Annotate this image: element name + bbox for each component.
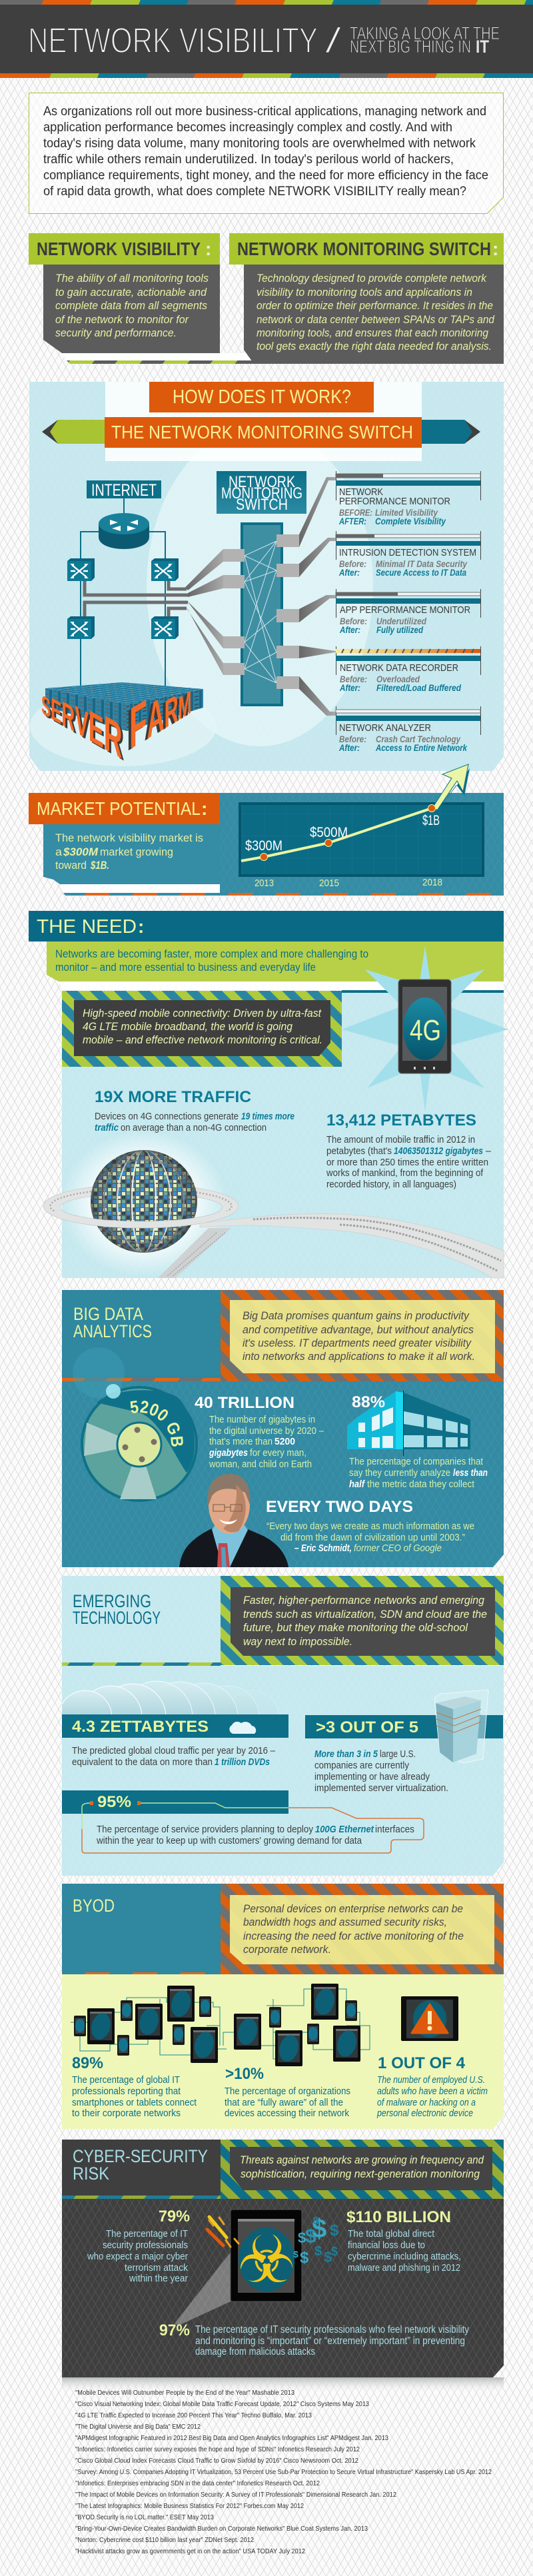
icon: dollar signs xyxy=(293,2214,339,2267)
definition text xyxy=(257,272,494,352)
stat: 13,412 petabytes: or more than 250 times the entire written xyxy=(326,1157,488,1168)
heading colon: : xyxy=(201,798,207,819)
references list: "4G LTE Traffic Expected to Increase 200 Percent This Year" Techno Buffalo, Mar. 2013 xyxy=(75,2411,312,2419)
panel shadow xyxy=(62,2377,504,2393)
references list: "Infonetics: Enterprises embracing SDN in the data center" Infonetics Research Oct. 2012 xyxy=(75,2479,320,2487)
server farm: FARM xyxy=(127,663,189,765)
quote: every two days: former CEO of Google xyxy=(354,1543,442,1554)
illustration: data globe with paper ribbon xyxy=(43,1130,504,1278)
network links xyxy=(81,498,165,686)
server farm xyxy=(41,661,203,772)
callout: corporate network. xyxy=(243,1943,331,1956)
icon: cloud xyxy=(229,1722,256,1734)
references list: "Mobile Devices Will Outnumber People by the End of the Year" Mashable 2013 xyxy=(75,2389,294,2397)
panel: network visibility definition xyxy=(29,233,254,360)
icon: dollar signs: $ xyxy=(331,2245,338,2258)
stat: 19x more traffic: traffic xyxy=(95,1123,119,1133)
heading colon: : xyxy=(138,916,144,937)
intro text box: today's rising data volume, many monitoring tools are overwhelmed with network xyxy=(43,137,476,151)
panel: network monitoring switch definition xyxy=(67,233,504,364)
definition text: order to optimize their performance. It resides in the xyxy=(257,299,493,312)
tool: network data recorder: Before: xyxy=(340,674,367,684)
stat: 40 trillion: the digital universe by 2020 – xyxy=(209,1426,324,1437)
stat: 110 billion: $110 BILLION xyxy=(346,2208,451,2226)
stat: 19x more traffic: 19X MORE TRAFFIC xyxy=(95,1088,251,1106)
stat: 89%: smartphones or tablets connect xyxy=(72,2098,197,2108)
market text: $1B. xyxy=(90,859,109,872)
tool: network performance monitor: NETWORK xyxy=(339,486,383,498)
definition text: tool gets exactly the right data needed for analysis. xyxy=(257,340,492,352)
callout: increasing the need for active monitoring of the xyxy=(243,1930,464,1942)
quote: every two days xyxy=(266,1498,474,1554)
callout: into networks and applications to make it all work. xyxy=(243,1350,475,1363)
lead text xyxy=(55,948,368,973)
illustration: connected devices xyxy=(71,1984,370,2066)
stat: 19x more traffic: Devices on 4G connections generate xyxy=(95,1111,239,1122)
disc capacity label: 5200 GB xyxy=(131,1401,183,1447)
tool: intrusion detection system xyxy=(336,531,481,578)
value labels xyxy=(245,813,440,854)
stat: over 10%: devices accessing their network xyxy=(225,2108,350,2119)
stat: 95%: within the year to keep up with customers' growing demand for data xyxy=(96,1836,362,1846)
switch label box: MONITORING xyxy=(221,484,302,502)
heading: MARKET POTENTIAL xyxy=(37,798,201,819)
references list: "APMdigest Infographic Featured in 2012 Best Big Data and Open Analytics Infographics List" APMdigest Jan. 2013 xyxy=(75,2434,388,2442)
tool: network analyzer: After: xyxy=(338,742,360,753)
references list: "Norton: Cybercrime cost $110 billion last year" ZDNet Sept. 2012 xyxy=(75,2536,254,2544)
stat: more than 3 out of 5: More than 3 in 5 xyxy=(314,1749,378,1760)
stat: 40 trillion: for every man, xyxy=(250,1448,306,1459)
references list xyxy=(75,2389,492,2555)
stat: 4.3 zettabytes: equivalent to the data on more than xyxy=(72,1757,213,1768)
line chart xyxy=(240,764,483,889)
stat: 1 out of 4 xyxy=(376,2054,488,2119)
tool: network data recorder xyxy=(336,646,481,693)
stat: 79%: security professionals xyxy=(103,2240,188,2251)
intro text box: application performance becomes increasingly complex and costly. And with xyxy=(43,121,452,135)
stat: 4.3 zettabytes: The predicted global cloud traffic per year by 2016 – xyxy=(72,1746,276,1756)
icon: dollar signs: $ xyxy=(300,2249,309,2267)
stat: 97%: and monitoring is “important” or “extremely important” in preventing xyxy=(195,2335,465,2347)
stat: 79% xyxy=(87,2208,190,2284)
tool: app performance monitor xyxy=(336,589,481,635)
stat: 79%: 79% xyxy=(159,2208,190,2226)
definition text: visibility to monitoring tools and applications in xyxy=(257,286,472,299)
tool: network analyzer xyxy=(336,706,481,753)
tool: network analyzer: NETWORK ANALYZER xyxy=(339,722,431,734)
stat: 1 out of 4: 1 OUT OF 4 xyxy=(378,2054,466,2072)
icon: dollar signs: $ xyxy=(324,2249,332,2265)
server farm: SERVER xyxy=(43,671,125,772)
intro text box xyxy=(29,93,504,213)
heading: TECHNOLOGY xyxy=(73,1608,161,1628)
stat: 89%: to their corporate networks xyxy=(72,2108,181,2119)
panel: BYOD xyxy=(62,1884,504,2129)
icon: dollar signs: $ xyxy=(313,2216,319,2227)
header banner xyxy=(0,0,533,78)
stat: 97%: The percentage of IT security professionals who feel network visibility xyxy=(195,2324,469,2335)
icon: dollar signs: $ xyxy=(298,2230,306,2246)
stat: 110 billion: The total global direct xyxy=(348,2229,434,2240)
stat: 110 billion xyxy=(346,2208,461,2273)
icon: dollar signs: $ xyxy=(314,2244,322,2259)
heading: EMERGING xyxy=(73,1591,151,1611)
central switch block xyxy=(223,524,299,705)
portrait: Eric Schmidt xyxy=(179,1474,288,1567)
references list: "Cisco Visual Networking Index: Global Mobile Data Traffic Forecast Update, 2012" Cisco Systems May 2013 xyxy=(75,2400,369,2408)
callout: way next to impossible. xyxy=(243,1635,352,1648)
stat: 13,412 petabytes: petabytes (that's xyxy=(326,1146,392,1157)
icon: dollar signs: $ xyxy=(305,2226,316,2248)
year labels: 2013 xyxy=(255,878,274,889)
tool: network analyzer: Before: xyxy=(339,734,366,744)
stat: 110 billion: cybercrime including attacks, xyxy=(348,2252,461,2262)
callout xyxy=(230,2147,492,2190)
icon: faint disc xyxy=(73,1347,125,1398)
illustration: stack of DVDs xyxy=(62,1680,278,1714)
definition text: to gain accurate, actionable and xyxy=(55,286,207,299)
server farm: SERVER xyxy=(41,669,123,770)
heading xyxy=(73,2146,208,2184)
definition text: network or data center between SPANs or TAPs and xyxy=(257,313,494,326)
tool: intrusion detection system: Minimal IT Data Security xyxy=(376,558,468,569)
definition text: Technology designed to provide complete network xyxy=(257,272,487,285)
tool: intrusion detection system: INTRUSION DETECTION SYSTEM xyxy=(339,547,476,558)
stat: 40 trillion: The number of gigabytes in xyxy=(209,1415,315,1425)
top colour stripe xyxy=(0,0,533,5)
subtitle: NEXT BIG THING IN xyxy=(350,37,471,57)
year labels: 2018 xyxy=(422,877,442,888)
how does it work heading: HOW DOES IT WORK? xyxy=(173,386,351,408)
stat: 19x more traffic: on average than a non-4G connection xyxy=(121,1123,266,1133)
tool: app performance monitor: After: xyxy=(339,624,360,635)
banner: the network monitoring switch: THE NETWORK MONITORING SWITCH xyxy=(111,422,413,442)
title: NETWORK VISIBILITY xyxy=(28,21,318,61)
subtitle xyxy=(350,23,500,57)
icon: attack arrows xyxy=(207,2217,239,2247)
stat: 89%: 89% xyxy=(72,2054,103,2072)
stat: 1 out of 4: of malware or hacking on a xyxy=(377,2098,476,2108)
definition text xyxy=(55,272,209,339)
subtitle: IT xyxy=(476,37,489,57)
callout: Faster, higher-performance networks and emerging xyxy=(243,1594,485,1607)
tool: network performance monitor: PERFORMANCE MONITOR xyxy=(339,496,450,507)
intro text box: As organizations roll out more business-critical applications, managing network and xyxy=(43,105,486,119)
panel: market potential xyxy=(29,764,504,896)
light beam xyxy=(175,2252,231,2325)
stat: more than 3 out of 5: large U.S. xyxy=(380,1749,416,1760)
callout: mobile connectivity xyxy=(62,991,342,1067)
tool: network performance monitor: Limited Visibility xyxy=(375,507,438,518)
heading colon: : xyxy=(492,239,498,259)
heading: RISK xyxy=(73,2164,109,2184)
stat: 97% xyxy=(159,2321,469,2357)
stat: 40 trillion: gigabytes xyxy=(209,1448,248,1459)
switch label box xyxy=(217,471,306,514)
callout: Big Data promises quantum gains in productivity xyxy=(243,1309,470,1322)
sparkle xyxy=(106,1384,121,1399)
stat: 97%: 97% xyxy=(159,2321,190,2339)
stat: 110 billion: financial loss due to xyxy=(348,2240,425,2251)
title slash: / xyxy=(324,21,342,61)
stat: 89% xyxy=(72,2054,197,2119)
callout: trends such as virtualization, SDN and cloud are the xyxy=(243,1608,487,1620)
callout: mobile connectivity: mobile – and effective network monitoring is critical. xyxy=(83,1033,322,1046)
callout: it's useless. IT departments need greater visibility xyxy=(243,1337,472,1349)
definition text: complete data from all segments xyxy=(55,299,207,312)
references list: "The Latest Infographics: Mobile Business Statistics For 2012" Forbes.com May 2012 xyxy=(75,2502,304,2510)
heading: NETWORK VISIBILITY xyxy=(37,239,201,259)
tool: intrusion detection system: After: xyxy=(338,567,360,578)
heading xyxy=(73,1591,161,1628)
stat: 79%: terrorism attack xyxy=(125,2263,189,2273)
market text: The network visibility market is xyxy=(55,832,203,844)
value labels: $300M xyxy=(245,838,282,854)
tool: network data recorder: NETWORK DATA RECORDER xyxy=(340,662,458,674)
quote: every two days: EVERY TWO DAYS xyxy=(266,1498,413,1516)
stat: 13,412 petabytes xyxy=(326,1111,492,1190)
stat: 88%: half xyxy=(349,1479,366,1490)
stat: 19x more traffic xyxy=(95,1088,294,1133)
references list: "Cisco Global Cloud Index Forecasts Cloud Traffic to Grow Sixfold by 2016" Cisco Newsroom Oct. 2012 xyxy=(75,2457,358,2465)
references list: "BYOD Security is no LOL matter." ESET May 2013 xyxy=(75,2513,214,2521)
stat: over 10%: that are “fully aware” of all the xyxy=(225,2098,343,2108)
callout: mobile connectivity: 4G LTE mobile broadband, the world is going xyxy=(83,1020,292,1033)
lead text: monitor – and more essential to business and everyday life xyxy=(55,961,316,973)
stat: 4.3 zettabytes: 4.3 ZETTABYTES xyxy=(72,1718,209,1736)
stat: 95%: 100G Ethernet xyxy=(315,1824,374,1835)
icon: tablet with biohazard xyxy=(231,2210,302,2301)
tool: network performance monitor: AFTER: xyxy=(338,516,366,526)
stat: 13,412 petabytes: – xyxy=(486,1146,492,1157)
icon: malware warning tablet xyxy=(401,1996,458,2041)
stat: 1 out of 4: personal electronic device xyxy=(376,2108,473,2119)
year labels: 2015 xyxy=(319,878,339,889)
tool: app performance monitor: Before: xyxy=(340,616,367,626)
stat: 19x more traffic: 19 times more xyxy=(241,1111,294,1122)
stat: 110 billion: malware and phishing in 2012 xyxy=(348,2263,460,2273)
switch label box: NETWORK xyxy=(229,473,295,491)
heading colon: : xyxy=(205,239,211,259)
tool: network data recorder: Filtered/Load Buffered xyxy=(376,682,461,693)
stat: 4.3 zettabytes: 1 trillion DVDs xyxy=(215,1757,270,1768)
heading: THE NEED xyxy=(37,916,137,938)
panel: cyber-security risk xyxy=(62,2140,504,2377)
stat: 1 out of 4: adults who have been a victim xyxy=(377,2086,488,2097)
callout: Personal devices on enterprise networks can be xyxy=(243,1902,463,1915)
stat: 13,412 petabytes: works of mankind, from the beginning of xyxy=(326,1168,484,1179)
stat: 88%: say they currently analyze xyxy=(349,1468,450,1479)
icon: switches xyxy=(67,558,179,639)
stat: 88%: The percentage of companies that xyxy=(349,1457,483,1467)
stat: 13,412 petabytes: The amount of mobile traffic in 2012 in xyxy=(326,1135,475,1145)
references list: "Hacktivist attacks grow as governments get in on the action" USA TODAY July 2012 xyxy=(75,2547,305,2555)
callout: future, but they make monitoring the old-school xyxy=(243,1621,468,1634)
stat: 95%: The percentage of service providers planning to deploy xyxy=(97,1824,314,1835)
circuit outline xyxy=(82,1803,424,1853)
references list: "Infonetics: Infonetics carrier survey exposes the hope and hype of SDNs" Infonetics Research July 2012 xyxy=(75,2445,360,2453)
references list: "Bring-Your-Own-Device Creates Bandwidth Burden on Corporate Networks" Blue Coat Systems Jan. 2013 xyxy=(75,2525,368,2533)
callout xyxy=(230,1895,494,1964)
icon: tablet with biohazard: ☣ xyxy=(237,2222,296,2298)
stat: over 10% xyxy=(225,2065,350,2119)
stat: 95%: interfaces xyxy=(375,1824,414,1835)
panel: emerging technology xyxy=(59,1576,504,1876)
stat: 13,412 petabytes: recorded history, in all languages) xyxy=(326,1179,456,1190)
heading: CYBER-SECURITY xyxy=(73,2146,208,2166)
tool: network data recorder: After: xyxy=(339,682,360,693)
how does it work heading xyxy=(149,382,374,412)
callout xyxy=(230,1300,495,1373)
definition text: security and performance. xyxy=(55,326,177,339)
callout: Threats against networks are growing in frequency and xyxy=(240,2154,484,2166)
value labels: $500M xyxy=(310,825,348,840)
references list: "The Digital Universe and Big Data" EMC 2012 xyxy=(75,2423,201,2431)
intro text box: traffic while others remain underutilized. In today's perilous world of hackers, xyxy=(43,153,454,167)
definition text: of the network to monitor for xyxy=(55,313,189,326)
switch label box: SWITCH xyxy=(236,496,288,514)
stat: 79%: within the year xyxy=(129,2273,188,2284)
stat: 97%: damage from malicious attacks xyxy=(195,2346,315,2357)
heading: ANALYTICS xyxy=(73,1321,152,1341)
tool: network analyzer: Access to Entire Network xyxy=(375,742,468,753)
panel: big data analytics xyxy=(62,1290,504,1567)
intro text box: compliance requirements, tight money, and the need for more efficiency in the face xyxy=(43,169,488,183)
stat: 13,412 petabytes: 14063501312 gigabytes xyxy=(394,1146,483,1157)
callout xyxy=(231,1587,495,1656)
heading: NETWORK MONITORING SWITCH xyxy=(237,239,491,259)
references list: "The Impact of Mobile Devices on Information Security: A Survey of IT Professionals" Dimensional Research Jan. 2012 xyxy=(75,2491,396,2499)
stat: 40 trillion: woman, and child on Earth xyxy=(209,1459,312,1470)
tool: app performance monitor: Fully utilized xyxy=(376,624,423,635)
stat: 89%: The percentage of global IT xyxy=(72,2075,180,2086)
callout: and competitive advantage, but without analytics xyxy=(243,1323,474,1336)
stat: more than 3 out of 5: companies are currently xyxy=(314,1760,410,1771)
tool: app performance monitor: APP PERFORMANCE MONITOR xyxy=(340,604,470,616)
stat: more than 3 out of 5: implemented server virtualization. xyxy=(314,1783,448,1794)
illustration: 5200 GB globe disc xyxy=(81,1384,198,1502)
data points xyxy=(260,805,436,861)
stat: more than 3 out of 5 xyxy=(305,1690,503,1794)
stat: 95%: 95% xyxy=(97,1793,131,1811)
tool: intrusion detection system: Secure Access to IT Data xyxy=(376,567,466,578)
market text: market growing xyxy=(100,846,173,858)
internet box: INTERNET xyxy=(91,481,157,500)
market text: $300M xyxy=(63,846,99,858)
stat: 13,412 petabytes: 13,412 PETABYTES xyxy=(326,1111,476,1129)
icon: dollar signs: $ xyxy=(293,2249,298,2259)
panel: how does it work xyxy=(29,382,504,772)
tool: network performance monitor xyxy=(336,471,481,526)
heading: BIG DATA xyxy=(73,1304,143,1324)
callout: mobile connectivity: High-speed mobile connectivity: Driven by ultra-fast xyxy=(83,1007,322,1019)
output data paths xyxy=(299,477,336,716)
heading xyxy=(73,1304,152,1341)
server farm: FARM xyxy=(129,661,191,763)
tool: network performance monitor: BEFORE: xyxy=(339,507,372,518)
icon: office building xyxy=(347,1391,470,1456)
value labels: $1B xyxy=(422,813,440,828)
icon: 4G phone with starburst xyxy=(342,946,508,1111)
icon: server in glass case xyxy=(434,1690,488,1763)
year labels xyxy=(255,877,442,889)
callout: bandwidth hogs and assumed security risks, xyxy=(243,1916,447,1928)
tool: network performance monitor: Complete Visibility xyxy=(375,516,446,526)
intro text box: of rapid data growth, what does complete NETWORK VISIBILITY really mean? xyxy=(43,185,466,199)
stat: more than 3 out of 5: >3 OUT OF 5 xyxy=(316,1718,418,1736)
stat: 4.3 zettabytes xyxy=(62,1714,288,1768)
market text xyxy=(55,832,203,872)
88 percent figure: 88% xyxy=(352,1393,385,1411)
stat: 79%: The percentage of IT xyxy=(106,2229,188,2240)
icon: dollar signs: $ xyxy=(312,2214,326,2244)
definition text: monitoring tools, and ensures that each monitoring xyxy=(257,326,488,339)
stat: 88%: the metric data they collect xyxy=(367,1479,474,1490)
tool: network analyzer: Crash Cart Technology xyxy=(376,734,461,744)
callout: sophistication, requiring next-generation monitoring xyxy=(241,2168,480,2180)
growth arrow xyxy=(433,764,470,812)
heading: BYOD xyxy=(73,1896,115,1916)
stat: 79%: who expect a major cyber xyxy=(87,2252,188,2262)
market text: toward xyxy=(55,859,87,872)
stat: more than 3 out of 5: implementing or have already xyxy=(314,1772,430,1782)
stat: 88% xyxy=(347,1391,488,1490)
icon: 4G phone with starburst: 4G xyxy=(410,1014,441,1047)
stat: 1 out of 4: The number of employed U.S. xyxy=(377,2075,485,2086)
tool: network data recorder: Overloaded xyxy=(376,674,420,684)
banner: the network monitoring switch xyxy=(42,417,480,448)
input data paths xyxy=(85,549,223,675)
market text: a xyxy=(55,846,63,858)
quote: every two days: did from the dawn of civilization up until 2003.” xyxy=(280,1533,465,1543)
stat: 40 trillion: that's more than xyxy=(209,1437,272,1447)
icon: router xyxy=(99,513,149,549)
quote: every two days: – Eric Schmidt, xyxy=(294,1543,352,1554)
definition text: The ability of all monitoring tools xyxy=(55,272,209,285)
stat: 40 trillion xyxy=(195,1394,324,1470)
icon: dollar signs: $ xyxy=(330,2222,339,2240)
stat: 88%: less than xyxy=(453,1468,488,1479)
bottom colour stripe xyxy=(0,73,533,78)
stat: over 10%: >10% xyxy=(225,2065,264,2083)
tool: intrusion detection system: Before: xyxy=(339,558,366,569)
lead text: Networks are becoming faster, more complex and more challenging to xyxy=(55,948,368,960)
quote: every two days: “Every two days we create as much information as we xyxy=(266,1521,474,1532)
stat: 89%: professionals reporting that xyxy=(72,2086,181,2097)
tool: app performance monitor: Underutilized xyxy=(376,616,426,626)
stat: 95% xyxy=(62,1790,424,1853)
stat: 40 trillion: 40 TRILLION xyxy=(195,1394,294,1412)
stat: 40 trillion: 5200 xyxy=(274,1437,295,1447)
panel: the need xyxy=(29,911,508,1278)
stat: over 10%: The percentage of organizations xyxy=(225,2086,350,2097)
